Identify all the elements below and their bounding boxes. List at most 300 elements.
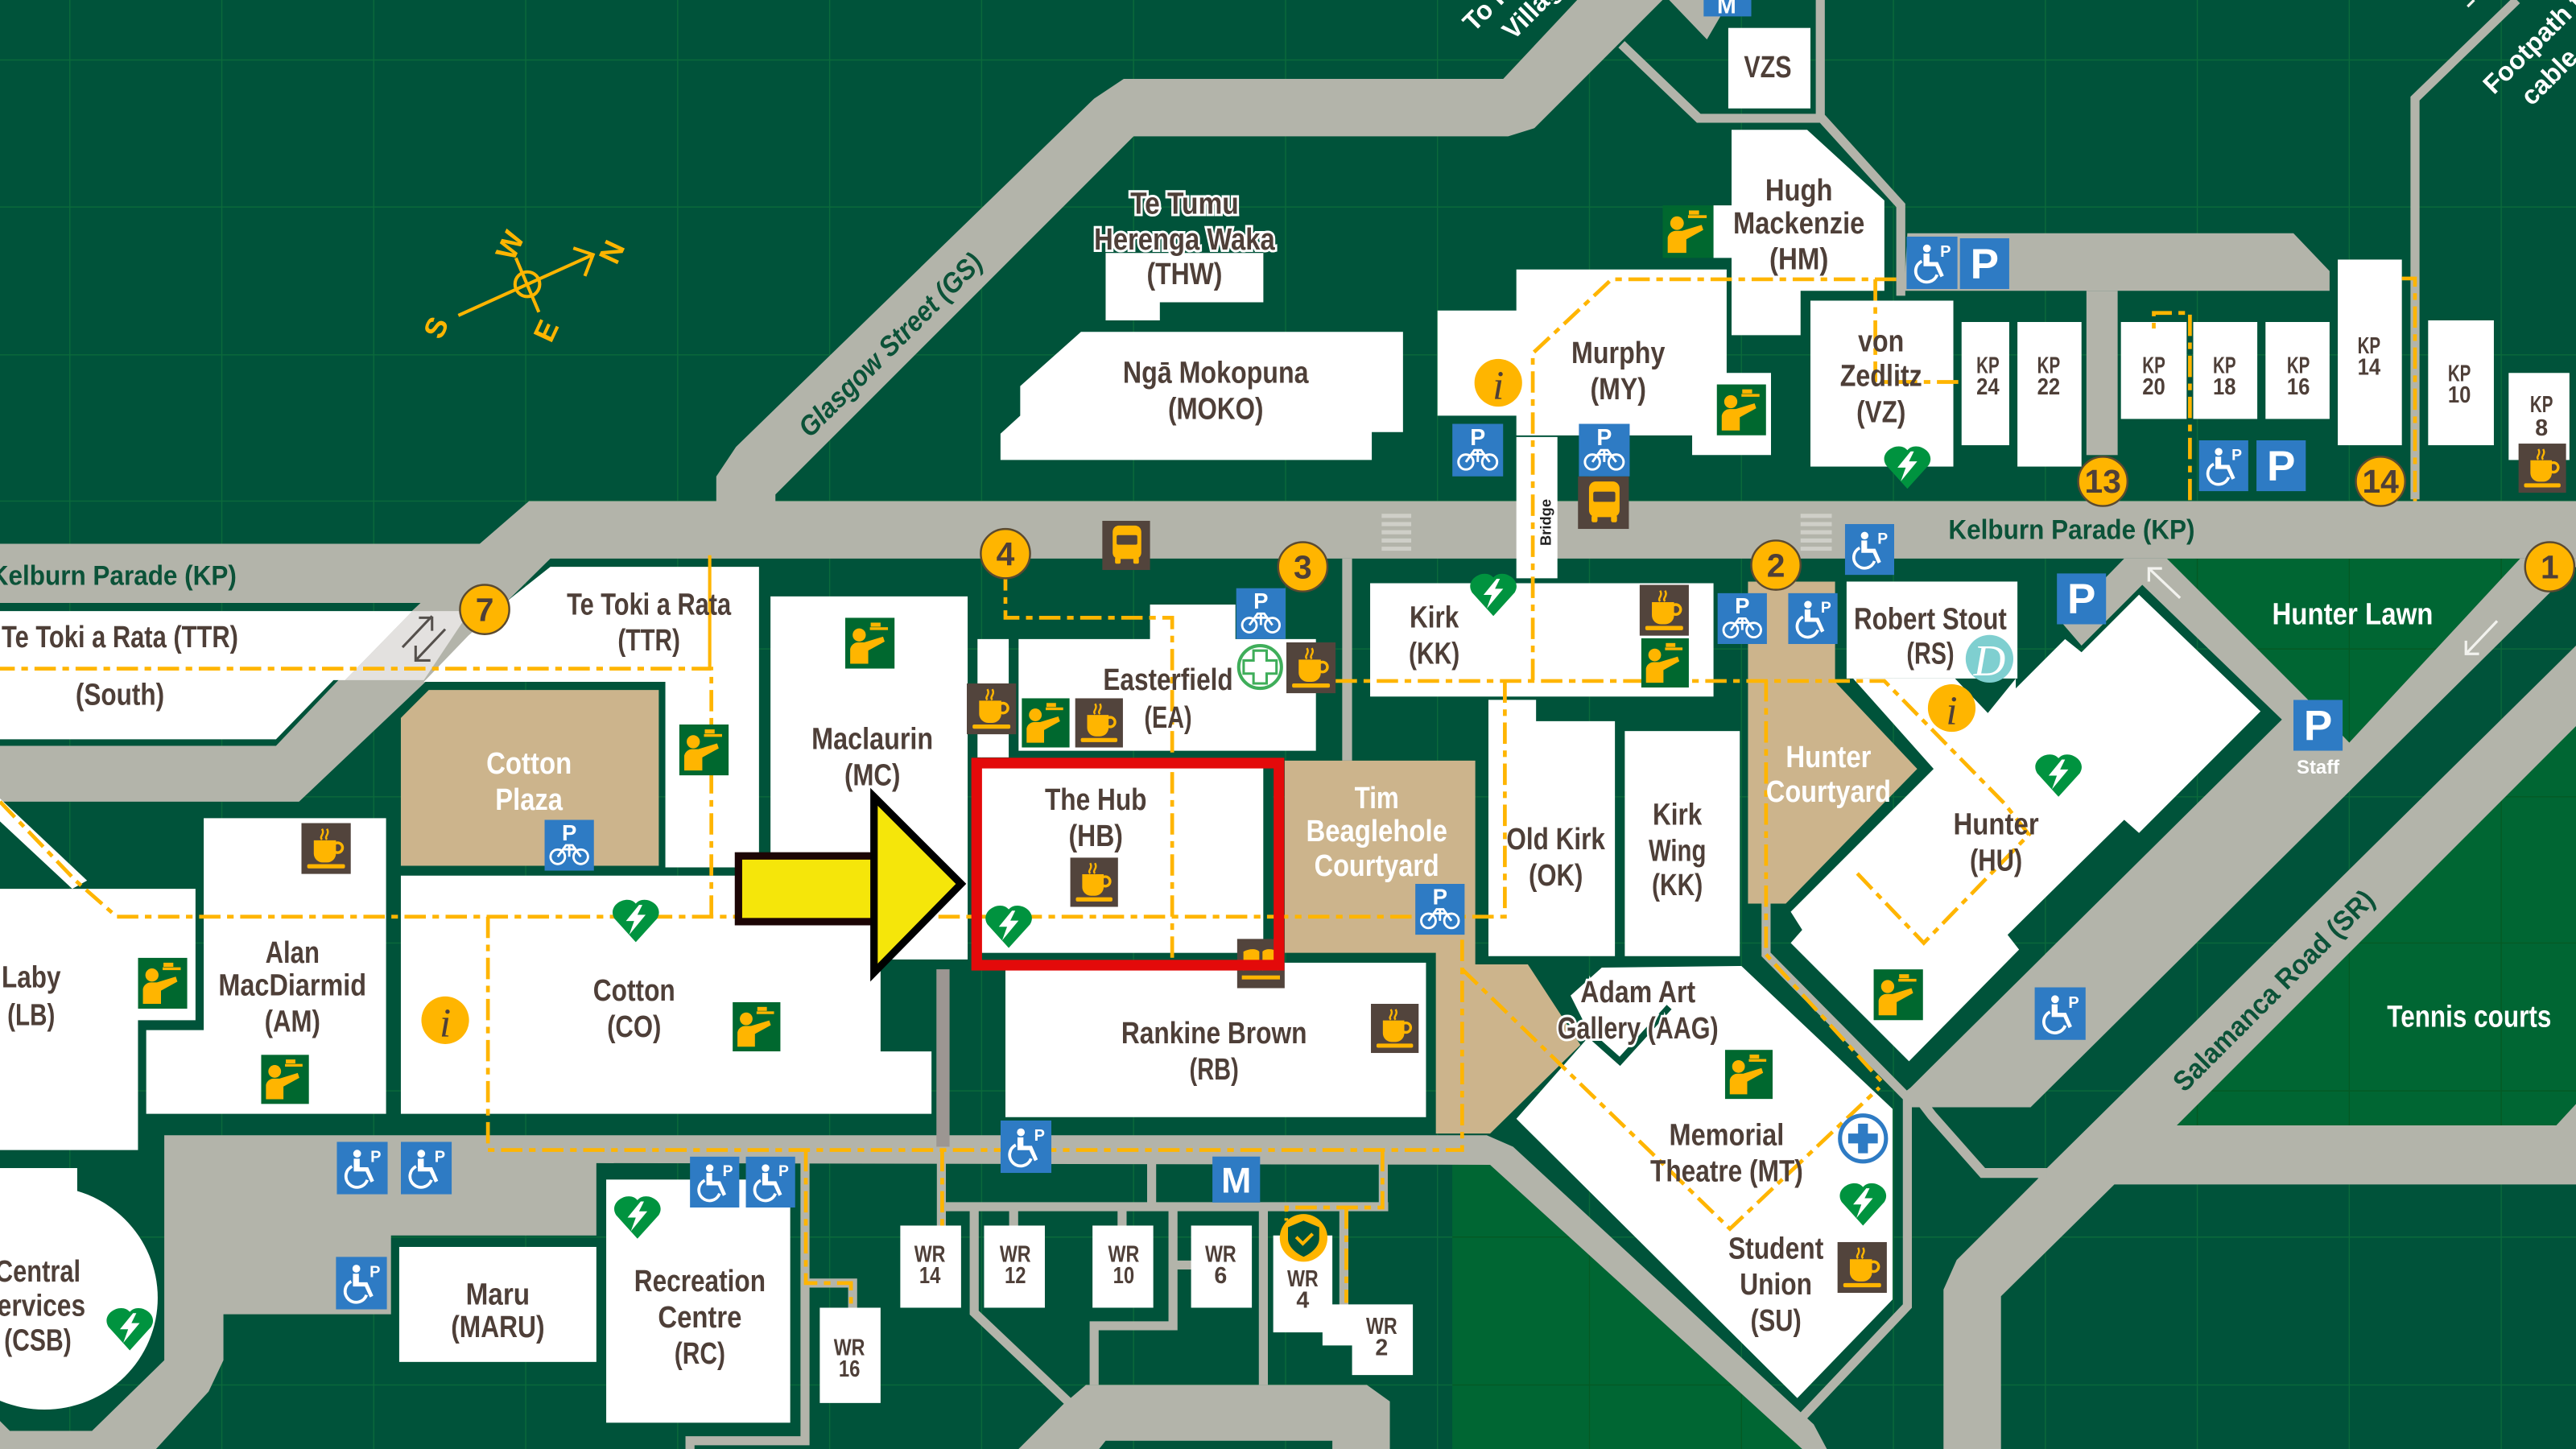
icon: food Kirk (1641, 638, 1689, 687)
label: KP 10: 10 (2448, 382, 2471, 408)
label: Recreation Centre: Centre (658, 1300, 741, 1334)
icon: bike parking Murphy (1579, 424, 1629, 477)
label: WR 10: WR (1108, 1241, 1140, 1267)
label: KP 20: KP (2142, 353, 2165, 378)
label: Recreation Centre: (RC) (675, 1336, 725, 1370)
label: Kirk Wing: (KK) (1652, 868, 1703, 902)
label: WR 2: 2 (1375, 1335, 1388, 1361)
label: Hunter Courtyard: Hunter (1785, 740, 1872, 774)
entrance 14 (2356, 456, 2405, 506)
icon: accessible Recreation 2 (746, 1157, 795, 1208)
label: Easterfield: (EA) (1144, 700, 1192, 734)
icon: cafe Student Union (1838, 1242, 1887, 1293)
entrance 13 (2079, 456, 2128, 506)
label: KP 18: 18 (2213, 374, 2236, 400)
label: Old Kirk (1506, 822, 1606, 892)
icons: bike parking (545, 424, 1767, 935)
label: WR 6 (1205, 1241, 1236, 1289)
numbered entrances (460, 456, 2574, 634)
icon: info Murphy (1475, 359, 1522, 409)
icon: AED Hunter (2035, 754, 2082, 797)
label: von Zedlitz: von (1858, 324, 1904, 358)
label: Laby: Laby (2, 960, 61, 994)
label: Cotton Plaza: Plaza (495, 782, 564, 816)
label: KP 16: KP (2287, 353, 2310, 378)
building: KP 22 (2017, 322, 2082, 467)
label: Hunter (1954, 807, 2039, 877)
label: WR 4: WR (1287, 1266, 1319, 1292)
label: WR 16 (834, 1335, 865, 1382)
label: Rankine Brown (1121, 1016, 1307, 1086)
icon: cafe Alan MacDiarmid (301, 823, 351, 874)
icon: mobility M (1212, 1157, 1260, 1203)
icon: green cross first aid (1239, 646, 1282, 688)
label: Murphy: (MY) (1591, 372, 1646, 406)
road: Hugh Mackenzie car park (1904, 233, 2330, 291)
label: WR 6: 6 (1214, 1263, 1227, 1289)
diagonal walkway to Laby (0, 799, 87, 889)
icon: cafe Kirk (1640, 585, 1689, 636)
label: KP 18 (2213, 353, 2236, 400)
entrance 1: 1 (2541, 548, 2559, 585)
compass: E (527, 315, 565, 347)
label: Kirk Wing: Kirk (1653, 797, 1703, 831)
icon: bike parking Murphy west (1452, 424, 1503, 477)
entrance 4 (980, 529, 1030, 578)
label: Recreation Centre (634, 1264, 766, 1370)
icon: bike parking Cotton Plaza (545, 819, 594, 871)
label: Bridge: Bridge (1538, 499, 1554, 546)
label: WR 10 (1108, 1241, 1140, 1289)
label: Cotton: Cotton (593, 973, 675, 1007)
icon: D disability services: D (1973, 636, 2005, 685)
label: von Zedlitz: Zedlitz (1840, 359, 1922, 393)
icon: food Hugh Mackenzie (1662, 205, 1714, 258)
icon: library book (1237, 939, 1285, 989)
road: south car park (1018, 1385, 1390, 1449)
route: Murphy (1533, 279, 1901, 680)
icon: info Murphy: i (1492, 364, 1504, 409)
label: WR 12: 12 (1005, 1263, 1026, 1289)
label: Rankine Brown: Rankine Brown (1121, 1016, 1307, 1050)
label: Te Tumu Herenga Waka: Te Tumu (1130, 186, 1239, 220)
label: Hugh Mackenzie: (HM) (1769, 242, 1828, 276)
icon: food Te Toki a Rata (679, 724, 729, 775)
icon: food Hunter (1874, 969, 1923, 1020)
label: WR 10: 10 (1113, 1263, 1134, 1289)
label: von Zedlitz: (VZ) (1856, 394, 1905, 428)
building: Murphy (1438, 270, 1771, 455)
route: Te Toki a Rata (0, 669, 712, 917)
grass: lower lawn (1452, 1165, 1802, 1449)
building: Maru (399, 1247, 597, 1362)
label: Te Toki a Rata north: (TTR) (617, 623, 680, 657)
building: Recreation Centre (606, 1179, 791, 1422)
label: Laby (2, 960, 61, 1031)
crossing over Kelburn Parade (345, 611, 470, 680)
icon: top blue marker (1703, 0, 1752, 19)
building: KP 10 (2428, 320, 2494, 445)
label: KP 20: 20 (2142, 374, 2165, 400)
label: Kirk: Kirk (1410, 601, 1459, 634)
label: Easterfield (1103, 663, 1233, 734)
road: Glasgow Street (716, 0, 1662, 501)
building: KP 18 (2193, 322, 2257, 419)
label: KP 10: KP (2448, 361, 2471, 386)
label: KP 8 (2530, 392, 2553, 441)
road: west car park (0, 1135, 1827, 1449)
label: Cotton (593, 973, 675, 1043)
route: Kirk to Hunter (1335, 681, 2029, 943)
label: Maclaurin: (MC) (844, 758, 900, 792)
icon: cafe Rankine Brown (1371, 1004, 1418, 1053)
label: Hugh Mackenzie (1733, 173, 1864, 276)
building: Old Kirk (1488, 700, 1615, 956)
label: Murphy (1571, 336, 1665, 406)
building: VZS (1728, 28, 1810, 109)
route: Recreation Centre (806, 1150, 851, 1307)
label: von Zedlitz (1840, 324, 1922, 428)
label: KP 16 (2287, 353, 2310, 400)
route: south walkway (488, 917, 1462, 1150)
label: Alan MacDiarmid: Alan (266, 935, 320, 969)
dark strip in The Hub (1263, 766, 1274, 956)
label: Adam Art Gallery: Gallery (AAG) (1558, 1011, 1719, 1045)
label: Central Services (0, 1254, 85, 1357)
building: WR 12 (984, 1225, 1045, 1307)
road: car park stub (2087, 291, 2118, 455)
building: Rankine Brown (1005, 963, 1426, 1117)
building: Ngā Mokopuna (1001, 332, 1403, 460)
label: Hunter Lawn: Hunter Lawn (2272, 597, 2433, 631)
label: KP 14 (2358, 333, 2380, 380)
road: Salamanca Road (1943, 646, 2576, 1449)
icon: info Hunter: i (1946, 689, 1958, 734)
icon: accessible Recreation 1 (690, 1157, 739, 1208)
icon: accessible Rankine Brown (1001, 1121, 1051, 1173)
label: WR 16: 16 (839, 1356, 860, 1382)
arrow head (874, 797, 961, 972)
road: top triangle (1669, 0, 1730, 39)
label: Easterfield: Easterfield (1103, 663, 1233, 696)
label: Student Union: (SU) (1750, 1303, 1802, 1337)
icon: AED Central Services (106, 1308, 153, 1351)
label: Rankine Brown: (RB) (1190, 1052, 1239, 1086)
building: Te Tumu Herenga Waka (1105, 253, 1263, 320)
path beside Easterfield (1342, 559, 1352, 761)
label: Alan MacDiarmid: MacDiarmid (218, 968, 366, 1002)
label: VZS: VZS (1744, 50, 1792, 84)
building: Kirk (1370, 583, 1714, 696)
label: KP 10 (2448, 361, 2471, 408)
icon: accessible car park 1 (336, 1141, 388, 1195)
label: Maru: (MARU) (451, 1310, 545, 1344)
icon: cafe KP 8 (2519, 444, 2566, 493)
icon: cafe The Hub (1071, 857, 1118, 907)
crossing arrows (402, 616, 445, 660)
road: Hunter ring (1910, 559, 2576, 1108)
building: WR 6 (1191, 1225, 1252, 1307)
icon: accessible Maru (336, 1257, 387, 1310)
label: Recreation Centre: Recreation (634, 1264, 766, 1298)
label: Tim Beaglehole Courtyard: Courtyard (1315, 848, 1439, 882)
label: WR 12 (1000, 1241, 1031, 1289)
label: Cotton Plaza: Cotton (486, 746, 572, 780)
highlight: red box around The Hub (976, 763, 1279, 965)
road: Kelburn Parade (0, 501, 2576, 802)
icon: blue cross health (1840, 1116, 1886, 1162)
icon: parking Hugh Mackenzie (1960, 238, 2009, 289)
label: KP 18: KP (2213, 353, 2236, 378)
courtyard: Hunter (1748, 581, 1918, 903)
label: KP 24 (1976, 353, 2000, 400)
label: Robert Stout: (RS) (1906, 636, 1955, 670)
building: Maclaurin link (977, 639, 1009, 758)
icon: accessible Hunter south (2035, 988, 2086, 1040)
entrance 7: 7 (476, 591, 493, 628)
entrance 1 (2525, 542, 2574, 592)
label: Hugh Mackenzie: Hugh (1765, 173, 1833, 207)
label: Old Kirk: (OK) (1529, 858, 1583, 892)
road: service lane (1910, 1088, 2047, 1173)
courtyard: Cotton Plaza (401, 690, 658, 866)
label: Te Tumu Herenga Waka: Herenga Waka (1094, 222, 1276, 256)
icons: accessible parking (336, 237, 2248, 1310)
label: Robert Stout (1854, 602, 2007, 670)
building: WR 14 (900, 1225, 961, 1307)
label: Robert Stout: Robert Stout (1854, 602, 2007, 636)
label: Te Tumu Herenga Waka (1094, 186, 1276, 291)
courtyard: Tim Beaglehole (1285, 761, 1580, 1133)
label: Tim Beaglehole Courtyard (1306, 781, 1447, 882)
entrance 3: 3 (1294, 548, 1312, 585)
label: Laby: (LB) (7, 997, 55, 1031)
icon: food Alan MacDiarmid (261, 1055, 309, 1104)
entrance 14: 14 (2362, 463, 2399, 500)
label: Cotton Plaza (486, 746, 572, 816)
label: Te Toki a Rata north: Te Toki a Rata (567, 587, 732, 621)
building: KP 16 (2265, 322, 2330, 419)
icon: AED Memorial Theatre (1839, 1183, 1886, 1225)
label: KP 24: KP (1976, 353, 2000, 378)
label: Adam Art Gallery: Adam Art (1580, 975, 1695, 1009)
label: Maclaurin (811, 722, 933, 792)
label: KP 22 (2037, 353, 2060, 400)
entrance 7 (460, 585, 510, 634)
icon: food Murphy (1717, 385, 1766, 436)
icon: accessible car park 2 (401, 1141, 452, 1195)
icon: AED Kirk (1470, 574, 1517, 616)
label: Hugh Mackenzie: Mackenzie (1733, 206, 1864, 240)
building: Central Services (0, 1168, 158, 1410)
building: von Zedlitz (1810, 300, 1954, 467)
label: Te Tumu Herenga Waka: (THW) (1146, 257, 1222, 291)
label: Hunter: (HU) (1970, 844, 2022, 877)
label: Maclaurin: Maclaurin (811, 722, 933, 756)
route: WR 2 and 4 (1286, 1150, 1382, 1302)
thin footpaths (690, 0, 2517, 1449)
zebra crossing east (1801, 516, 1832, 549)
entrance 2: 2 (1767, 547, 1785, 584)
label: Kirk Wing (1649, 797, 1706, 902)
label: Memorial Theatre: Theatre (MT) (1650, 1154, 1803, 1187)
icons: parking (1960, 238, 2343, 751)
building: Hunter (1790, 595, 2260, 1061)
label: Hunter Courtyard: Courtyard (1766, 774, 1891, 808)
label: The Hub: (HB) (1069, 819, 1123, 852)
label: KP 16: 16 (2287, 374, 2310, 400)
route: Easterfield (1005, 576, 1172, 958)
grass: tennis courts (2177, 726, 2576, 1125)
route: Hunter Courtyard lane (1766, 680, 1881, 1081)
building: Alan MacDiarmid (147, 818, 386, 1114)
icon: cafe Easterfield (1075, 698, 1123, 748)
building: KP 14 (2338, 259, 2402, 445)
label: Memorial Theatre: Memorial (1669, 1117, 1784, 1151)
label: Kirk Wing: Wing (1649, 833, 1706, 867)
label: KP 8: 8 (2535, 415, 2548, 441)
label: Te Toki a Rata south: (South) (76, 678, 164, 712)
building: WR 4 and WR 2 (1274, 1236, 1413, 1375)
label: KP 22: KP (2037, 353, 2060, 378)
entrance 3 (1278, 542, 1327, 592)
label: Maru: Maru (466, 1277, 530, 1311)
road labels (0, 0, 2576, 1097)
icon: D disability services (1966, 635, 2013, 685)
label: KP 22: 22 (2037, 374, 2060, 400)
route: KP 10 (2402, 279, 2415, 501)
route: WR 14 (941, 1150, 943, 1225)
label: Ngā Mokopuna: (MOKO) (1168, 391, 1263, 425)
label: Memorial Theatre (1650, 1117, 1803, 1187)
gallery divider (1591, 1007, 1669, 1061)
compass (417, 225, 631, 347)
icon: cafe Easterfield east (1286, 642, 1335, 693)
icon: bus stop Kelburn west (1102, 521, 1150, 570)
label: Adam Art Gallery (1558, 975, 1719, 1045)
building: Hugh Mackenzie (1714, 130, 1885, 335)
label: Salamanca Road: Salamanca Road (SR) (2167, 885, 2380, 1097)
label: Maru (451, 1277, 545, 1344)
label: Alan MacDiarmid: (AM) (265, 1005, 320, 1038)
icons: food service (138, 205, 1923, 1104)
compass: S (417, 312, 455, 344)
icon: staff parking (2293, 700, 2343, 751)
icon: accessible Hunter Courtyard (1788, 593, 1838, 644)
icon: AED Cotton (613, 900, 659, 942)
icon: food Cotton (733, 1002, 780, 1051)
icons: defibrillators (106, 447, 2082, 1351)
label: The Hub (1045, 782, 1146, 852)
label: Kirk (1409, 601, 1459, 670)
label: Te Toki a Rata north (567, 587, 732, 657)
building: Cotton (401, 876, 931, 1114)
compass: W (489, 225, 531, 265)
label: Murphy: Murphy (1571, 336, 1665, 369)
label: WR 4: 4 (1296, 1287, 1309, 1313)
icon: AED von Zedlitz (1885, 447, 1930, 489)
icon: AED Recreation Centre (614, 1196, 661, 1239)
building: WR 16 (819, 1307, 881, 1403)
label: Central Services: (CSB) (4, 1323, 72, 1357)
label: Te Toki a Rata south: Te Toki a Rata (TTR) (2, 620, 238, 654)
building: The Hub (979, 766, 1263, 953)
building: KP 20 (2121, 322, 2186, 419)
building: Kirk Wing (1624, 731, 1740, 956)
entrance 2 (1752, 540, 1801, 590)
icon: bike parking Kirk (1718, 593, 1767, 644)
icon: parking KP 16 (2256, 440, 2306, 491)
label: Student Union: Union (1740, 1267, 1812, 1301)
dark path beside The Hub (936, 969, 950, 1146)
label: WR 14: WR (914, 1241, 946, 1267)
building: Maclaurin (770, 597, 968, 960)
route: von Zedlitz (1876, 279, 1962, 382)
building: Te Toki a Rata north (424, 567, 759, 868)
icon: bike parking Tim Beaglehole (1415, 884, 1464, 935)
building: Robert Stout (1847, 581, 2017, 679)
icon: food Easterfield (1022, 698, 1070, 748)
walking routes (0, 279, 2415, 1307)
building: KP 8 (2508, 373, 2570, 460)
building: Bridge (1517, 437, 1558, 578)
entrance 13: 13 (2085, 463, 2121, 500)
entrance 4: 4 (997, 535, 1015, 572)
icon: cafe Maclaurin link (967, 683, 1016, 734)
arrow shaft (738, 856, 877, 922)
building: Memorial Theatre and Adam Art Gallery (1517, 966, 1893, 1398)
icon: info Cotton (421, 997, 469, 1046)
label: WR 12: WR (1000, 1241, 1031, 1267)
label: Staff: Staff (2297, 757, 2340, 778)
road arrows (2149, 0, 2497, 654)
icon: accessible KP 18 (2199, 440, 2248, 491)
icon: food Laby (138, 958, 188, 1009)
label: Hunter: Hunter (1954, 807, 2039, 841)
building: Easterfield (1018, 605, 1316, 751)
icon: food Maclaurin (845, 617, 894, 669)
label: Ngā Mokopuna: Ngā Mokopuna (1123, 356, 1309, 390)
icon: mobility M: M (1221, 1160, 1251, 1201)
icon: info Cotton: i (440, 1001, 451, 1046)
label: Te Toki a Rata south (2, 620, 238, 712)
building: Te Toki a Rata south (0, 611, 412, 739)
label: Glasgow Street: Glasgow Street (GS) (793, 247, 989, 444)
icon: food Memorial Theatre (1725, 1050, 1773, 1099)
label: Ngā Mokopuna (1123, 356, 1309, 425)
compass: N (592, 235, 631, 269)
label: WR 6: WR (1205, 1241, 1236, 1267)
label: KP 20 (2142, 353, 2165, 400)
zebra crossing west (1381, 516, 1411, 549)
label: WR 14: 14 (919, 1263, 940, 1289)
route: main east-west (0, 680, 1505, 917)
label: WR 2: WR (1366, 1314, 1397, 1340)
icon: bike parking Easterfield (1236, 588, 1286, 639)
icon: accessible Kelburn Parade (1845, 524, 1894, 575)
label: Tim Beaglehole Courtyard: Tim (1355, 781, 1399, 815)
building: WR 10 (1092, 1225, 1154, 1307)
label: Alan MacDiarmid (218, 935, 366, 1038)
route: Memorial Theatre V (1462, 969, 1880, 1229)
label: KP 14: 14 (2358, 354, 2380, 380)
label: The Hub: The Hub (1045, 782, 1146, 816)
label: Old Kirk: Old Kirk (1506, 822, 1606, 856)
label: Hunter Courtyard (1766, 740, 1891, 808)
label: WR 2 (1366, 1314, 1397, 1361)
icon: parking Hunter (2057, 573, 2106, 625)
icon: info Hunter (1928, 684, 1975, 734)
